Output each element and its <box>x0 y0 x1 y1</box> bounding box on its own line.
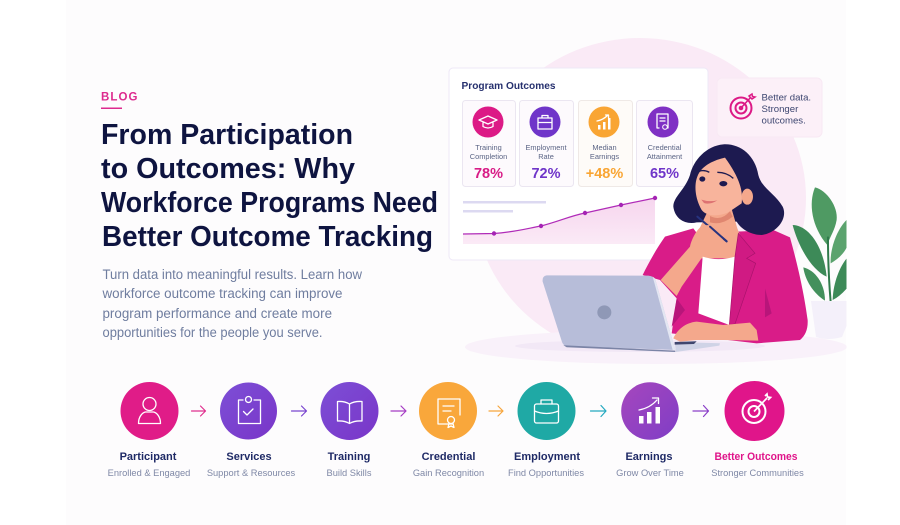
step: earnings: Grow Over Time <box>616 468 684 478</box>
arrow <box>391 406 406 416</box>
metric: median earnings: Median <box>592 143 617 152</box>
title <box>101 119 438 253</box>
callout text: Stronger <box>762 104 799 115</box>
metric: employment rate: Rate <box>538 152 554 161</box>
dashboard heading: Program Outcomes <box>462 80 556 92</box>
lapel <box>729 233 756 325</box>
ear <box>742 189 753 205</box>
step: participant: Participant <box>120 451 177 463</box>
callout text: outcomes. <box>762 116 806 126</box>
pen <box>697 217 727 241</box>
step: better outcomes <box>711 381 804 478</box>
step: better outcomes: Better Outcomes <box>714 451 798 463</box>
white shirt <box>698 257 735 325</box>
pen tip over hand <box>710 227 727 241</box>
callout text: Better data. <box>762 92 811 104</box>
metric: credential attainment: 65% <box>650 166 679 182</box>
intro paragraph: opportunities for the people you serve. <box>102 325 322 340</box>
step: credential <box>413 382 484 478</box>
metric: training completion <box>462 100 516 186</box>
callout text <box>762 92 811 126</box>
arrow <box>590 406 606 416</box>
step: services: Support & Resources <box>207 468 296 478</box>
metric: credential attainment: Attainment <box>647 152 682 161</box>
mouth <box>701 200 717 204</box>
step: employment <box>508 382 584 478</box>
step: credential: Credential <box>422 451 475 463</box>
blog label <box>101 92 138 109</box>
icon: target <box>730 94 755 118</box>
metric: median earnings <box>578 100 632 186</box>
step: training: Training <box>328 451 370 463</box>
metric: credential attainment: Credential <box>648 143 682 152</box>
metric: median earnings: +48% <box>586 166 623 182</box>
metric: employment rate: Employment <box>525 143 567 152</box>
pink background blob <box>474 38 806 358</box>
metric: credential attainment <box>636 100 692 186</box>
title: From Participation <box>101 119 353 151</box>
plant <box>793 187 848 302</box>
woman illustration <box>543 144 808 352</box>
title: to Outcomes: Why <box>101 153 355 185</box>
arrow <box>693 406 708 416</box>
eyes and brows <box>699 171 733 186</box>
metric: training completion: 78% <box>474 166 503 182</box>
callout: better data <box>717 78 822 137</box>
intro paragraph: program performance and create more <box>102 306 332 321</box>
intro paragraph: workforce outcome tracking can improve <box>102 286 343 301</box>
laptop <box>543 275 720 352</box>
plant pot <box>811 301 846 339</box>
step: employment: Employment <box>514 451 580 463</box>
step: participant <box>108 382 190 478</box>
arrow <box>489 406 503 416</box>
hand on desk <box>673 322 758 342</box>
step: earnings: Earnings <box>625 451 673 463</box>
panel: program outcomes dashboard <box>449 68 708 260</box>
step: better outcomes: Stronger Communities <box>711 468 804 478</box>
metric: employment rate <box>520 100 574 186</box>
arrow <box>292 406 306 416</box>
title: Better Outcome Tracking <box>102 221 433 253</box>
step: employment: Find Opportunities <box>508 468 584 478</box>
step: training <box>320 382 378 478</box>
step: earnings <box>616 382 684 478</box>
line chart <box>463 196 657 244</box>
step: participant: Enrolled & Engaged <box>108 468 190 478</box>
title: Workforce Programs Need <box>101 187 438 219</box>
intro paragraph: Turn data into meaningful results. Learn how <box>102 267 362 282</box>
arrow <box>192 406 206 416</box>
raised arm and hand <box>661 225 723 296</box>
hair <box>673 144 784 235</box>
intro paragraph <box>102 267 362 340</box>
step: services <box>207 382 296 478</box>
process flow <box>108 381 804 478</box>
desk surface <box>465 330 847 364</box>
placeholder lines <box>463 201 546 212</box>
metric: training completion: Training <box>475 143 502 152</box>
metric: employment rate: 72% <box>531 166 561 182</box>
step: services: Services <box>226 451 272 463</box>
metric: median earnings: Earnings <box>590 152 619 161</box>
jacket <box>643 228 808 343</box>
blog label: BLOG <box>101 92 138 104</box>
face <box>695 158 742 215</box>
metric: training completion: Completion <box>470 152 507 161</box>
neck and chest <box>693 209 740 258</box>
step: training: Build Skills <box>327 468 372 478</box>
step: credential: Gain Recognition <box>413 468 484 478</box>
